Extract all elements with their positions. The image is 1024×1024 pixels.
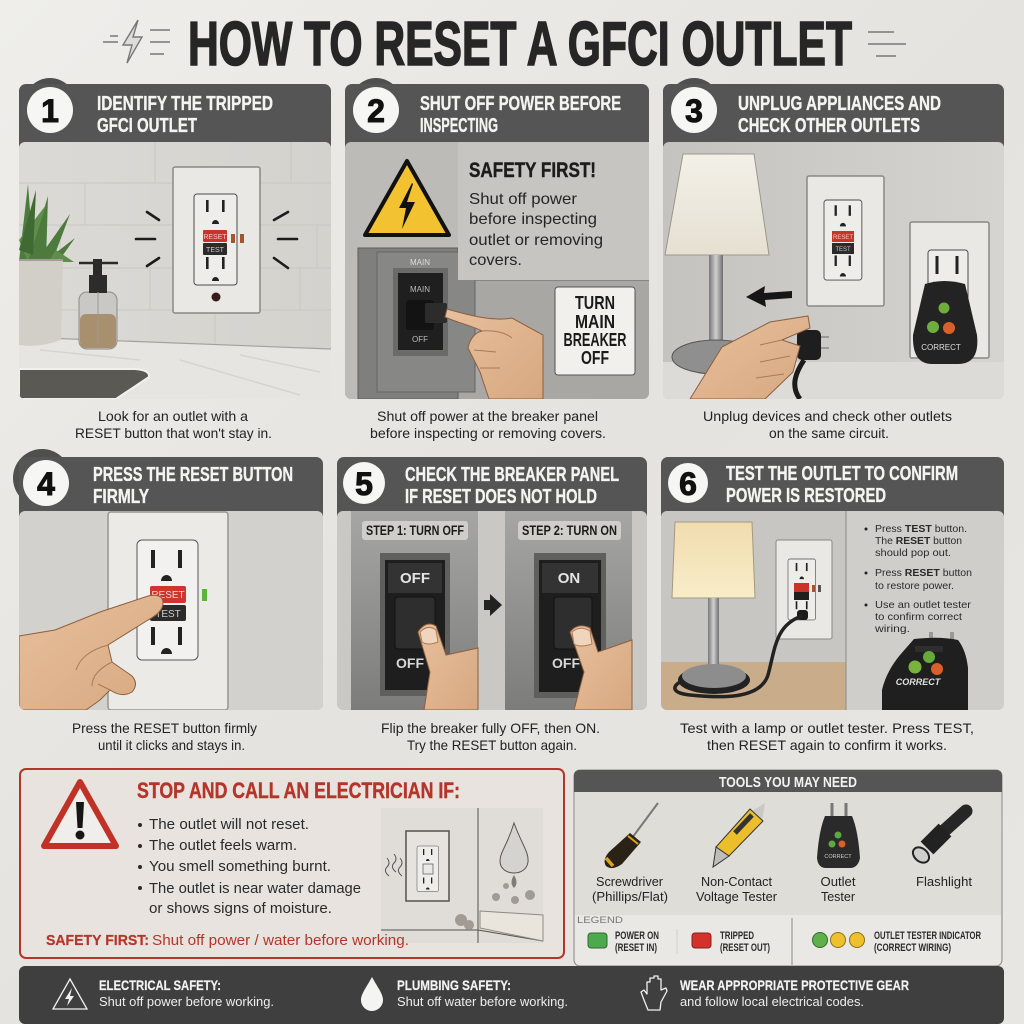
breaker off: OFF bbox=[396, 655, 424, 671]
text: protective gear: and follow local electrical codes. bbox=[680, 994, 864, 1009]
test instructions: to confirm correct bbox=[875, 611, 962, 623]
test instructions: The RESET button bbox=[875, 535, 962, 547]
tool: flashlight: Flashlight bbox=[916, 874, 972, 889]
caption 6: then RESET again to confirm it works. bbox=[707, 737, 947, 753]
callout: turn main breaker off: OFF bbox=[581, 348, 609, 368]
caption 5 bbox=[381, 720, 600, 753]
icon: hand unplugging cord bbox=[690, 316, 829, 399]
icon: high voltage warning triangle bbox=[365, 161, 449, 235]
test instructions: to restore power. bbox=[875, 580, 954, 592]
caption 2: before inspecting or removing covers. bbox=[370, 425, 606, 441]
illustration: finger pressing reset: TEST bbox=[155, 609, 181, 620]
panel 5: check breaker panel bbox=[337, 457, 647, 710]
callout: turn main breaker off: MAIN bbox=[575, 312, 615, 332]
icon: pointing hand bbox=[445, 309, 543, 399]
icon: gfci outlet: RESET bbox=[203, 234, 227, 241]
tool: outlet tester: Outlet bbox=[820, 874, 856, 889]
icon: attention rays bbox=[136, 212, 297, 268]
legend: (RESET OUT) bbox=[720, 942, 770, 954]
step number 3 bbox=[671, 87, 717, 133]
list: warning conditions: The outlet will not reset. bbox=[149, 816, 309, 833]
step number 1: 1 bbox=[41, 93, 59, 129]
safety first notice: SAFETY FIRST! bbox=[469, 159, 596, 182]
tool: voltage tester: Voltage Tester bbox=[696, 889, 778, 904]
illustration: damaged wall outlet bbox=[381, 808, 543, 943]
icon: wall outlet: TEST bbox=[835, 247, 851, 253]
list: warning conditions: or shows signs of moisture. bbox=[149, 900, 332, 917]
caption 1: Look for an outlet with a bbox=[98, 408, 248, 424]
icon: hand on right breaker bbox=[570, 626, 632, 710]
icon: outlet tester: CORRECT bbox=[896, 677, 942, 687]
icon: glove bbox=[641, 976, 667, 1010]
step number 5: 5 bbox=[355, 466, 373, 502]
text: plumbing safety: Shut off water before working. bbox=[397, 994, 568, 1009]
heading 1 bbox=[97, 93, 273, 137]
safety first notice: before inspecting bbox=[469, 211, 597, 228]
heading 4: PRESS THE RESET BUTTON bbox=[93, 464, 293, 486]
text: electrical safety bbox=[99, 977, 274, 1009]
test instructions: Press RESET button bbox=[875, 567, 972, 579]
text: protective gear bbox=[680, 977, 909, 1009]
caption 2 bbox=[370, 408, 606, 441]
step label off bbox=[362, 521, 468, 540]
illustration: breaker off then on bbox=[337, 511, 647, 710]
illustration: finger pressing reset bbox=[19, 511, 323, 710]
step number 5 bbox=[343, 462, 385, 504]
illustration: bathroom wall with outlet bbox=[19, 142, 331, 399]
legend: (CORRECT WIRING) bbox=[874, 942, 951, 954]
step label on bbox=[518, 521, 621, 540]
icon: pressing hand bbox=[19, 595, 163, 710]
caption 3: Unplug devices and check other outlets bbox=[703, 408, 952, 424]
caption 4 bbox=[72, 720, 257, 753]
step number 4 bbox=[23, 460, 69, 506]
caption 4: until it clicks and stays in. bbox=[98, 737, 245, 753]
step number 1 bbox=[27, 87, 73, 133]
callout: turn main breaker off: TURN bbox=[575, 293, 615, 313]
heading 5: CHECK THE BREAKER PANEL bbox=[405, 464, 619, 486]
illustration: breaker panel and safety notice: MAIN bbox=[410, 258, 430, 267]
step number 3: 3 bbox=[685, 93, 703, 129]
heading 2: SHUT OFF POWER BEFORE bbox=[420, 93, 621, 115]
callout: turn main breaker off bbox=[555, 287, 635, 375]
breaker on: OFF bbox=[552, 655, 580, 671]
icon: gfci outlet bbox=[173, 167, 260, 313]
caption 3 bbox=[703, 408, 952, 441]
text: protective gear: WEAR APPROPRIATE PROTECTIVE GEAR bbox=[680, 977, 909, 993]
safety first line bbox=[46, 932, 409, 949]
tool: screwdriver: (Phillips/Flat) bbox=[592, 889, 668, 904]
text: electrical safety: ELECTRICAL SAFETY: bbox=[99, 977, 221, 993]
icon: second outlet with tester bbox=[910, 222, 989, 364]
legend: LEGEND bbox=[577, 915, 624, 925]
heading 6 bbox=[726, 463, 958, 507]
tool: outlet tester: CORRECT bbox=[824, 854, 852, 860]
test instructions: should pop out. bbox=[875, 547, 951, 559]
tools header: TOOLS YOU MAY NEED bbox=[719, 774, 857, 791]
heading 3: CHECK OTHER OUTLETS bbox=[738, 115, 920, 137]
list: warning conditions: You smell something burnt. bbox=[149, 858, 331, 875]
legend: POWER ON bbox=[615, 930, 659, 942]
list: warning conditions: The outlet feels warm. bbox=[149, 837, 297, 854]
step number 2 bbox=[353, 87, 399, 133]
safety first line: SAFETY FIRST: bbox=[46, 932, 149, 949]
icon: electrical safety bbox=[53, 979, 87, 1009]
icon: second outlet with tester: CORRECT bbox=[921, 343, 961, 352]
step number 2: 2 bbox=[367, 93, 385, 129]
tool: outlet tester: Tester bbox=[821, 889, 856, 904]
caption 5: Try the RESET button again. bbox=[407, 737, 577, 753]
step label off: STEP 1: TURN OFF bbox=[366, 522, 464, 538]
caption 6: Test with a lamp or outlet tester. Press TEST, bbox=[680, 720, 974, 736]
legend: TRIPPED bbox=[720, 930, 754, 942]
list: warning conditions: The outlet is near water damage bbox=[149, 880, 361, 897]
test instructions bbox=[864, 523, 972, 635]
safety first notice: Shut off power bbox=[469, 191, 578, 208]
icon: wall outlet: RESET bbox=[833, 235, 853, 241]
step number 4: 4 bbox=[37, 466, 55, 502]
illustration: lamp, outlets and tester bbox=[663, 142, 1004, 399]
plant bbox=[19, 184, 75, 262]
text: plumbing safety bbox=[397, 977, 568, 1009]
panel 1: identify the tripped outlet bbox=[19, 78, 331, 399]
heading 5: IF RESET DOES NOT HOLD bbox=[405, 486, 597, 508]
heading 4: FIRMLY bbox=[93, 486, 150, 508]
illustration: finger pressing reset: RESET bbox=[151, 590, 185, 601]
heading 1: IDENTIFY THE TRIPPED bbox=[97, 93, 273, 115]
list: warning conditions bbox=[138, 816, 361, 917]
heading 3: UNPLUG APPLIANCES AND bbox=[738, 93, 941, 115]
panel: stop and call an electrician bbox=[20, 769, 564, 958]
soap bottle bbox=[79, 292, 117, 349]
text: plumbing safety: PLUMBING SAFETY: bbox=[397, 977, 511, 993]
legend bbox=[575, 915, 1001, 965]
icon: water drop bbox=[361, 977, 383, 1011]
panel 3: unplug appliances bbox=[663, 78, 1004, 399]
arrow bbox=[484, 594, 502, 616]
caption 5: Flip the breaker fully OFF, then ON. bbox=[381, 720, 600, 736]
heading: stop: STOP AND CALL AN ELECTRICIAN IF: bbox=[137, 778, 460, 803]
tool: outlet tester bbox=[817, 803, 860, 904]
caption 4: Press the RESET button firmly bbox=[72, 720, 257, 736]
safety first notice: covers. bbox=[469, 252, 522, 269]
tool: voltage tester bbox=[696, 803, 778, 904]
panel 4: press reset bbox=[13, 449, 323, 710]
icon: warning triangle bbox=[44, 782, 116, 846]
icon: wall outlet bbox=[807, 176, 884, 306]
lamp cord bbox=[675, 616, 802, 697]
tool: screwdriver: Screwdriver bbox=[596, 874, 664, 889]
legend: OUTLET TESTER INDICATOR bbox=[874, 930, 981, 942]
illustration: breaker panel and safety notice: OFF bbox=[412, 335, 428, 344]
panel 6: test the outlet bbox=[661, 457, 1004, 712]
arrow bbox=[746, 286, 792, 307]
breaker off: OFF bbox=[400, 570, 430, 587]
illustration: breaker panel and safety notice bbox=[345, 142, 649, 399]
footer safety bar bbox=[19, 966, 1004, 1024]
icon: wall outlet bbox=[776, 540, 832, 639]
icon: title lightning bolt left bbox=[103, 20, 170, 63]
breaker on: ON bbox=[558, 570, 580, 587]
heading 2 bbox=[420, 93, 621, 137]
illustration: lamp and outlet bbox=[661, 511, 1004, 712]
caption 3: on the same circuit. bbox=[769, 425, 889, 441]
heading 3 bbox=[738, 93, 941, 137]
tools header bbox=[574, 770, 1002, 792]
test instructions: Press TEST button. bbox=[875, 523, 967, 535]
breaker on bbox=[534, 553, 606, 698]
legend: (RESET IN) bbox=[615, 942, 657, 954]
callout: turn main breaker off: BREAKER bbox=[564, 330, 626, 350]
safety first notice bbox=[458, 142, 649, 280]
illustration: breaker panel and safety notice: MAIN bbox=[410, 285, 430, 294]
icon: outlet tester bbox=[882, 632, 968, 712]
heading 5 bbox=[405, 464, 619, 508]
icon: hand on left breaker bbox=[418, 624, 478, 710]
text: electrical safety: Shut off power before working. bbox=[99, 994, 274, 1009]
heading 1: GFCI OUTLET bbox=[97, 115, 197, 137]
icon: title decoration right bbox=[868, 32, 906, 56]
heading 2: INSPECTING bbox=[420, 115, 498, 137]
tool: flashlight bbox=[910, 811, 972, 889]
caption 1 bbox=[75, 408, 272, 441]
panel 2: shut off power bbox=[345, 78, 649, 399]
safety first notice: outlet or removing bbox=[469, 232, 603, 249]
heading 6: POWER IS RESTORED bbox=[726, 485, 886, 507]
step number 6: 6 bbox=[679, 466, 697, 502]
safety first line: Shut off power / water before working. bbox=[152, 932, 409, 949]
test instructions: Use an outlet tester bbox=[875, 599, 972, 611]
step number 6 bbox=[668, 463, 708, 503]
tool: voltage tester: Non-Contact bbox=[701, 874, 772, 889]
panel: tools you may need bbox=[574, 770, 1002, 966]
heading 4 bbox=[93, 464, 293, 508]
caption 6 bbox=[680, 720, 974, 753]
step label on: STEP 2: TURN ON bbox=[522, 522, 617, 538]
tool: screwdriver bbox=[592, 803, 668, 904]
caption 1: RESET button that won't stay in. bbox=[75, 425, 272, 441]
test instructions: wiring. bbox=[874, 623, 910, 635]
caption 2: Shut off power at the breaker panel bbox=[377, 408, 598, 424]
icon: gfci outlet: TEST bbox=[206, 247, 225, 254]
breaker off bbox=[380, 553, 450, 696]
